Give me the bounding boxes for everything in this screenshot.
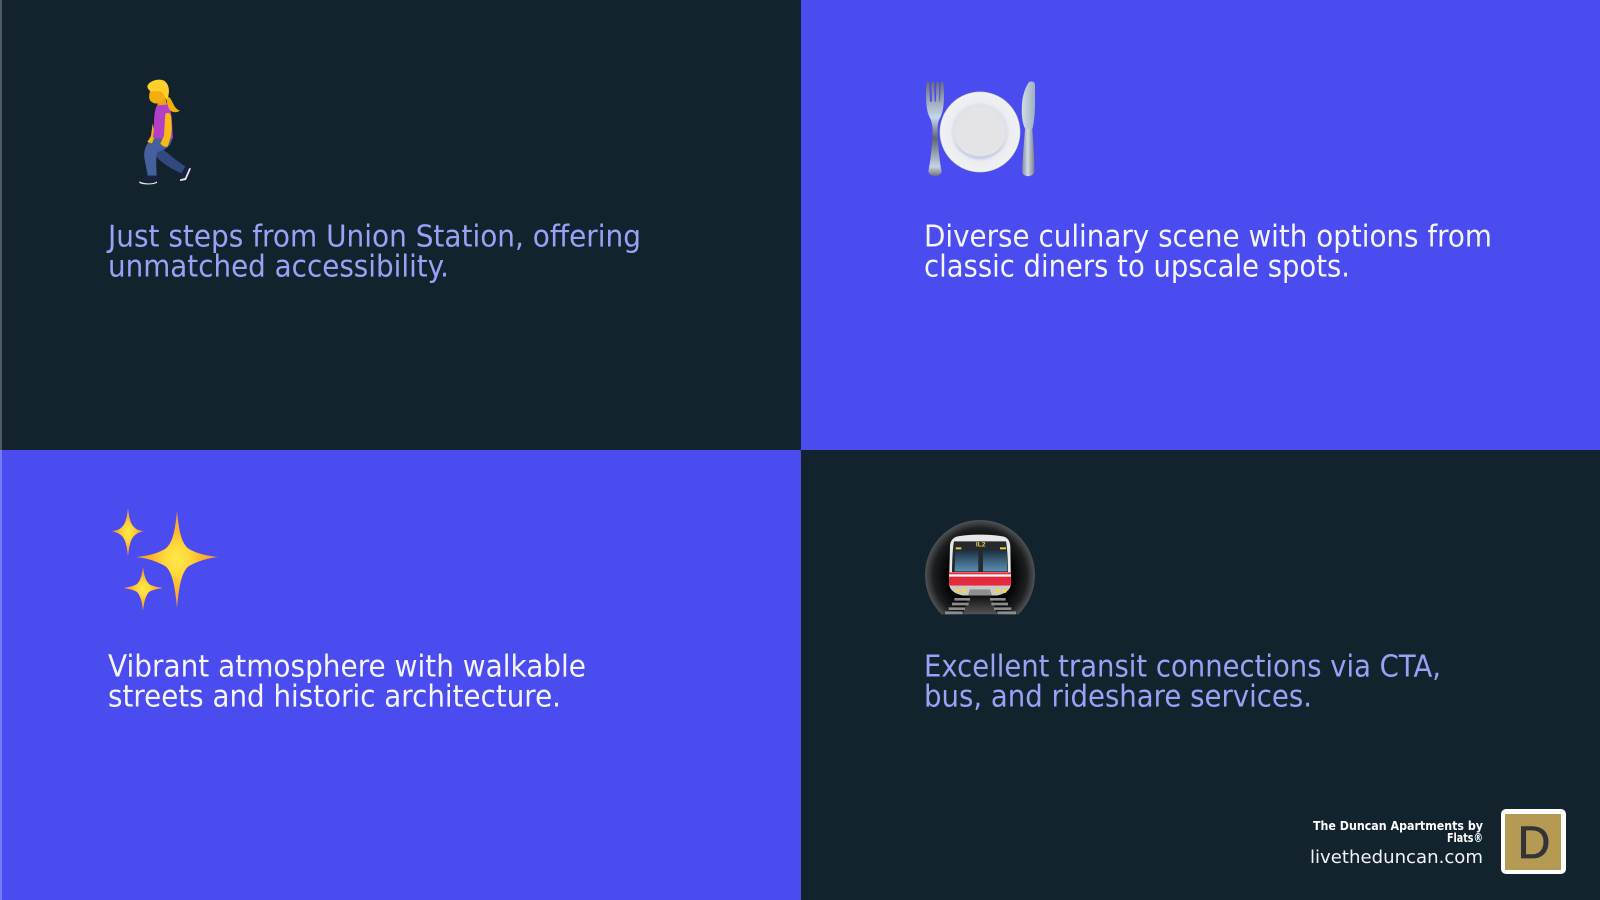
text: culinary description <box>924 220 1492 284</box>
icon: metro train in tunnel: IL2 <box>976 542 986 549</box>
website url: livetheduncan.com <box>1310 847 1483 868</box>
text: Union Station accessibility: Just steps from Union Station, offering <box>106 220 641 254</box>
text: atmosphere description: streets and historic architecture. <box>108 680 561 714</box>
logo: D <box>1518 817 1550 868</box>
text: transit description <box>924 650 1441 714</box>
text: culinary description: Diverse culinary scene with options from <box>924 220 1492 254</box>
icon: sparkles <box>112 508 218 611</box>
text: culinary description: classic diners to upscale spots. <box>924 250 1350 284</box>
footer brand <box>1310 809 1566 874</box>
logo <box>1501 809 1566 874</box>
icon: fork, plate and knife <box>926 81 1035 176</box>
panel: vibrant atmosphere <box>0 450 801 900</box>
icon: woman walking <box>139 80 191 184</box>
panel: transit connections <box>925 520 1566 874</box>
brand name: The Duncan Apartments by <box>1313 819 1483 833</box>
text: atmosphere description: Vibrant atmosphere with walkable <box>108 650 586 684</box>
text: atmosphere description <box>108 650 586 714</box>
text: Union Station accessibility: unmatched accessibility. <box>108 250 449 284</box>
text: Union Station accessibility <box>106 220 641 284</box>
panel: culinary scene <box>801 0 1600 450</box>
panel: walkable access <box>0 0 801 450</box>
text: transit description: bus, and rideshare services. <box>924 680 1312 714</box>
brand name <box>1313 819 1483 845</box>
text: transit description: Excellent transit connections via CTA, <box>924 650 1441 684</box>
brand name: Flats® <box>1447 831 1483 845</box>
icon: metro train in tunnel <box>925 520 1035 614</box>
